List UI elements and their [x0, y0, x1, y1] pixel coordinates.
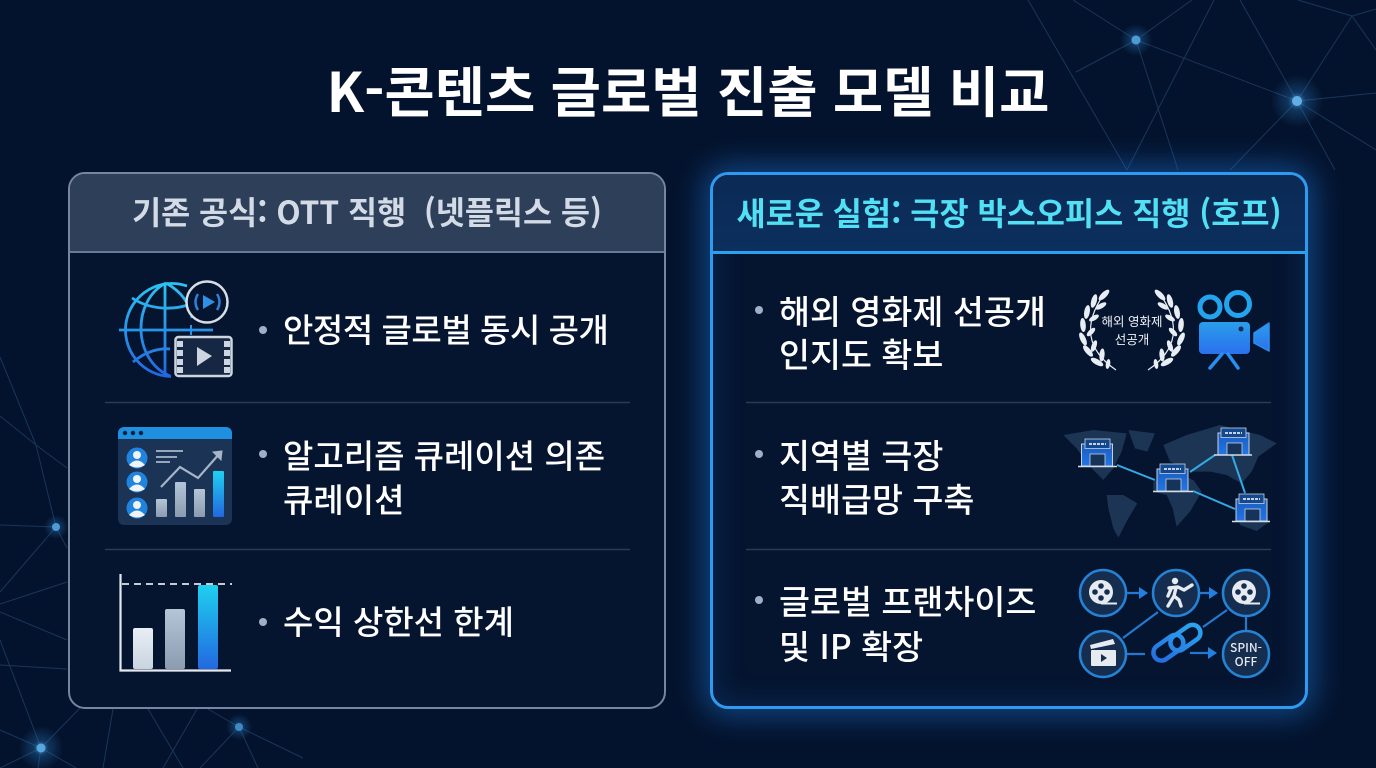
film reel node 1 — [1080, 570, 1126, 616]
icon: festival laurel: 선공개 — [1115, 329, 1149, 348]
text: algorithm curation: 알고리즘 큐레이션 의존 — [283, 430, 605, 478]
film reel node 2 — [1223, 570, 1269, 616]
theater: oceania — [1232, 494, 1270, 522]
action figure node — [1153, 570, 1199, 616]
world map — [1063, 425, 1277, 538]
panel: existing OTT model — [68, 172, 666, 709]
text: festival premiere: 해외 영화제 선공개 — [779, 285, 1046, 334]
icon: franchise flow — [1080, 570, 1269, 677]
panel header: OTT — [70, 174, 664, 253]
text: regional distribution: 지역별 극장 — [779, 429, 943, 478]
text: regional distribution: 직배급망 구축 — [779, 473, 974, 522]
icon: globe with video — [119, 282, 232, 376]
panel header: box office: 새로운 실험: 극장 박스오피스 직행 (호프) — [736, 189, 1282, 235]
theater: europe — [1153, 464, 1193, 492]
panel header: box office — [713, 175, 1305, 254]
text: regional distribution — [755, 429, 974, 522]
theater: asia — [1214, 428, 1252, 455]
icon: festival laurel: 해외 영화제 — [1101, 311, 1163, 330]
clapperboard node — [1080, 631, 1126, 677]
panel: new box office model — [710, 172, 1308, 709]
text: franchise and IP: 글로벌 프랜차이즈 — [779, 575, 1036, 624]
icon: festival laurel — [1078, 288, 1186, 370]
spin-off node: SPIN- — [1230, 639, 1262, 656]
text: stable global release: 안정적 글로벌 동시 공개 — [283, 304, 608, 352]
text: algorithm curation — [259, 430, 605, 522]
text: franchise and IP: 및 IP 확장 — [779, 620, 923, 669]
text: festival premiere: 인지도 확보 — [779, 328, 943, 377]
spin-off node: OFF — [1235, 653, 1258, 670]
text: algorithm curation: 큐레이션 — [283, 474, 404, 522]
icon: recommendation dashboard — [118, 427, 232, 525]
chain link — [1150, 622, 1204, 664]
text: revenue cap: 수익 상한선 한계 — [283, 596, 514, 644]
icon: movie camera — [1199, 292, 1269, 368]
icon: world map with theaters — [1063, 425, 1277, 538]
theater: americas — [1078, 439, 1117, 466]
connectors — [1123, 593, 1246, 654]
icon: capped bar chart — [120, 574, 232, 670]
text: franchise and IP — [755, 575, 1036, 669]
spin-off node — [1223, 631, 1269, 677]
panel header: OTT: 기존 공식: OTT 직행 (넷플릭스 등) — [132, 188, 602, 234]
title: K-콘텐츠 글로벌 진출 모델 비교 — [327, 49, 1049, 128]
text: festival premiere — [755, 285, 1046, 377]
